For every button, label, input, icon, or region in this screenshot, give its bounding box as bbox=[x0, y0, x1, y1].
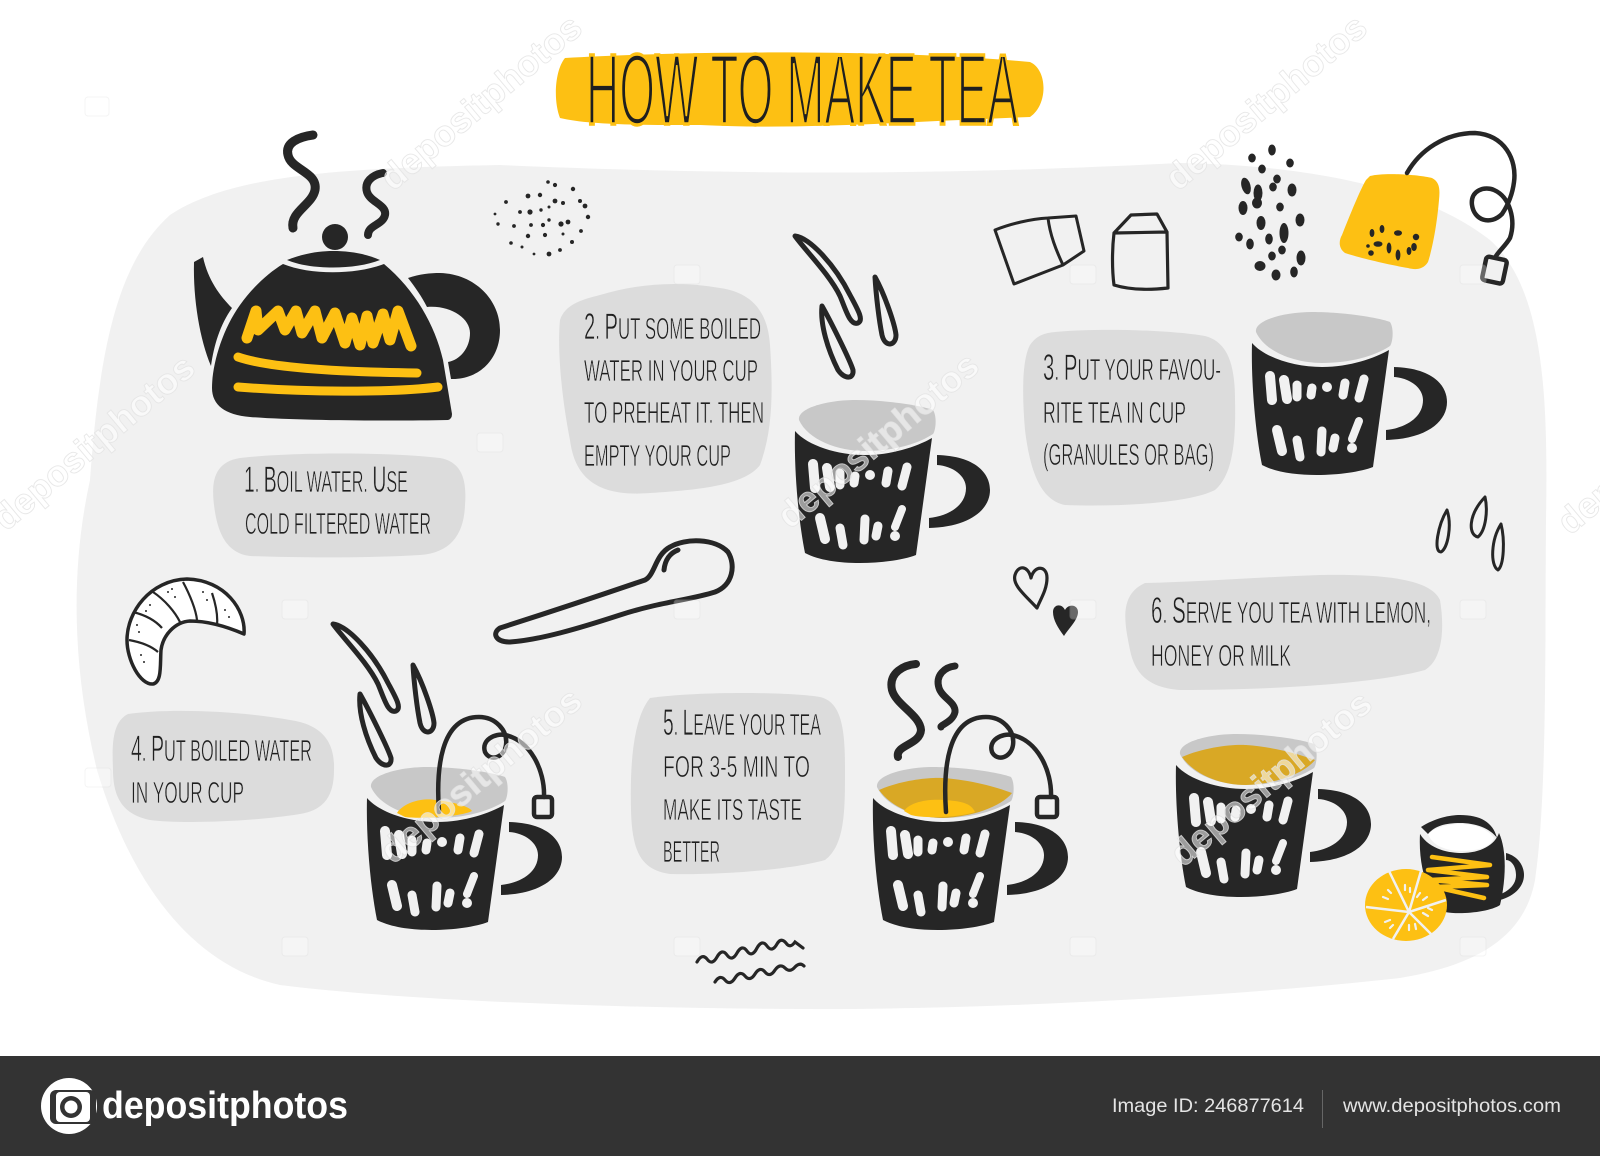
step 6 text box bbox=[1125, 575, 1442, 690]
icon: tea box bbox=[1112, 214, 1168, 289]
step 5 text box bbox=[631, 693, 845, 874]
icon: cup step 5 with steam and tea bag bbox=[873, 664, 1068, 930]
icon: lemon slice bbox=[1365, 869, 1447, 941]
step 1 text box bbox=[213, 454, 465, 557]
footer logo bbox=[41, 1078, 348, 1134]
depositphotos diagonal watermarks: depositphotos bbox=[1162, 682, 1380, 874]
squiggle lines bbox=[697, 940, 804, 983]
step 3 text box: RITE TEA IN CUP bbox=[1043, 395, 1186, 430]
step 2 text box: EMPTY YOUR CUP bbox=[584, 438, 731, 473]
step 5 text box: 5. LEAVE YOUR TEA bbox=[663, 702, 821, 743]
icon: spoon bbox=[496, 541, 732, 642]
icon: tea bag bbox=[1340, 133, 1514, 284]
step 1 text box: 1. BOIL WATER. USE bbox=[244, 459, 408, 500]
icon: croissant bbox=[127, 579, 244, 684]
icon: milk pitcher bbox=[1420, 815, 1524, 913]
icon: cup step 6 full of tea bbox=[1176, 734, 1371, 897]
depositphotos diagonal watermarks: depositphotos bbox=[372, 6, 590, 198]
faint camera watermarks bbox=[85, 97, 1486, 956]
step 5 text box: MAKE ITS TASTE bbox=[663, 792, 802, 827]
depositphotos diagonal watermarks: depositphotos bbox=[1157, 6, 1375, 198]
step 4 text box bbox=[113, 711, 334, 822]
step 5 text box: FOR 3-5 MIN TO bbox=[663, 749, 810, 784]
step 4 text box: 4. PUT BOILED WATER bbox=[131, 728, 312, 769]
step 5 text box: BETTER bbox=[663, 834, 720, 869]
pouring water drops above cup 2 bbox=[795, 236, 896, 377]
step 2 text box: 2. PUT SOME BOILED bbox=[584, 306, 761, 347]
title bbox=[556, 34, 1044, 146]
step 1 text box: COLD FILTERED WATER bbox=[245, 506, 431, 541]
step 3 text box bbox=[1023, 330, 1235, 505]
speckle dots large bbox=[1235, 144, 1306, 280]
icon: sugar cube bbox=[995, 216, 1084, 284]
icon: hearts bbox=[1015, 568, 1078, 636]
speckle dots small bbox=[494, 180, 590, 256]
step 2 text box: TO PREHEAT IT. THEN bbox=[584, 395, 764, 430]
depositphotos diagonal watermarks: depositphotos bbox=[372, 679, 590, 871]
step 6 text box: HONEY OR MILK bbox=[1151, 638, 1291, 673]
step 2 text box bbox=[559, 284, 772, 494]
text: HOW TO MAKE TEA bbox=[586, 34, 1018, 146]
footer logo: depositphotos bbox=[102, 1085, 348, 1127]
icon: cup step 3 bbox=[1252, 312, 1447, 475]
footer url: www.depositphotos.com bbox=[1342, 1095, 1561, 1117]
step 2 text box: WATER IN YOUR CUP bbox=[584, 353, 758, 388]
step 3 text box: 3. PUT YOUR FAVOU- bbox=[1043, 347, 1221, 388]
step 4 text box: IN YOUR CUP bbox=[131, 775, 244, 810]
icon: small outline drops bbox=[1437, 497, 1503, 570]
icon: teapot with steam bbox=[194, 135, 500, 421]
depositphotos diagonal watermarks bbox=[0, 6, 1600, 874]
step 3 text box: (GRANULES OR BAG) bbox=[1043, 437, 1214, 472]
footer bar bbox=[0, 1056, 1600, 1156]
background blob panel bbox=[77, 163, 1546, 1009]
footer image id: Image ID: 246877614 bbox=[1112, 1095, 1304, 1117]
depositphotos diagonal watermarks: depositphotos bbox=[769, 344, 987, 536]
pouring water drops above cup 4 bbox=[333, 624, 434, 765]
icon: cup step 4 with tea bag bbox=[367, 717, 562, 930]
icon: empty cup step 2 bbox=[795, 400, 990, 563]
